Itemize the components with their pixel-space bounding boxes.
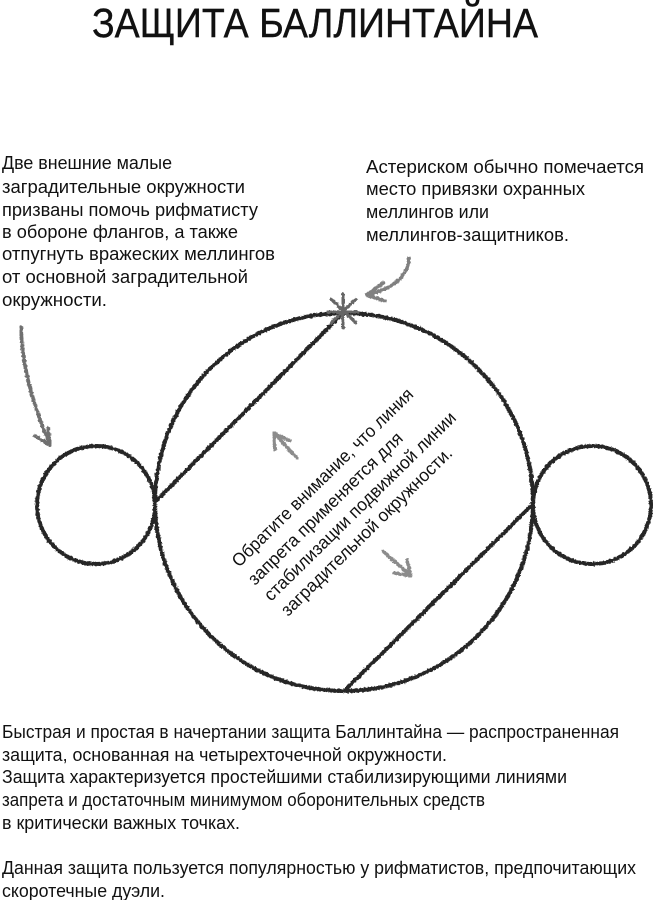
rotated note: заградительной окружности. [277, 443, 456, 620]
text block: flank circles note: Две внешние малые [2, 152, 172, 173]
text block: description: Быстрая и простая в начертании защита Баллинтайна — распространенная [2, 721, 619, 742]
diagram: Ballantine defence circles [37, 312, 651, 691]
text block: flank circles note: заградительные окружности [2, 176, 245, 197]
lower line of forbiddance [344, 505, 532, 691]
text block: flank circles note: в обороне флангов, а также [2, 221, 238, 242]
text block: description: в критически важных точках. [2, 812, 240, 833]
text block: flank circles note: отпугнуть вражеских меллингов [2, 243, 275, 264]
arrow: to left small circle [21, 327, 50, 445]
text block: asterisk note: меллингов-защитников. [366, 224, 569, 245]
text block: flank circles note: окружности. [2, 289, 107, 310]
text block: description: Защита характеризуется простейшими стабилизирующими линиями [2, 766, 567, 787]
text block: flank circles note [2, 152, 275, 310]
text block: description: защита, основанная на четырехточечной окружности. [2, 744, 447, 765]
right small warding circle [533, 446, 651, 564]
icon: asterisk [328, 294, 358, 328]
text block: popularity note [2, 857, 637, 900]
arrow: to asterisk [367, 258, 409, 301]
upper line of forbiddance [156, 312, 344, 501]
text block: asterisk note: меллингов или [366, 201, 489, 222]
text block: asterisk note: Астериском обычно помечается [366, 156, 644, 177]
main warding circle [155, 313, 533, 691]
text block: popularity note: Данная защита пользуется популярностью у рифматистов, предпочитающих [2, 857, 637, 878]
rotated note: запрета применяется для [244, 428, 407, 589]
left small warding circle [37, 446, 155, 564]
title: ЗАЩИТА БАЛЛИНТАЙНА [92, 0, 539, 46]
arrow: down-right [383, 551, 411, 576]
text block: description [2, 721, 619, 833]
rotated note: Обратите внимание, что линия [228, 384, 417, 571]
text block: flank circles note: от основной заградительной [2, 266, 248, 287]
text block: asterisk note [366, 156, 644, 245]
text block: flank circles note: призваны помочь рифматисту [2, 199, 259, 220]
rotated note: стабилизации подвижной линии [260, 408, 460, 605]
text block: description: запрета и достаточным минимумом оборонительных средств [2, 789, 485, 810]
text block: asterisk note: место привязки охранных [366, 178, 586, 199]
arrow: up-left [274, 433, 297, 458]
